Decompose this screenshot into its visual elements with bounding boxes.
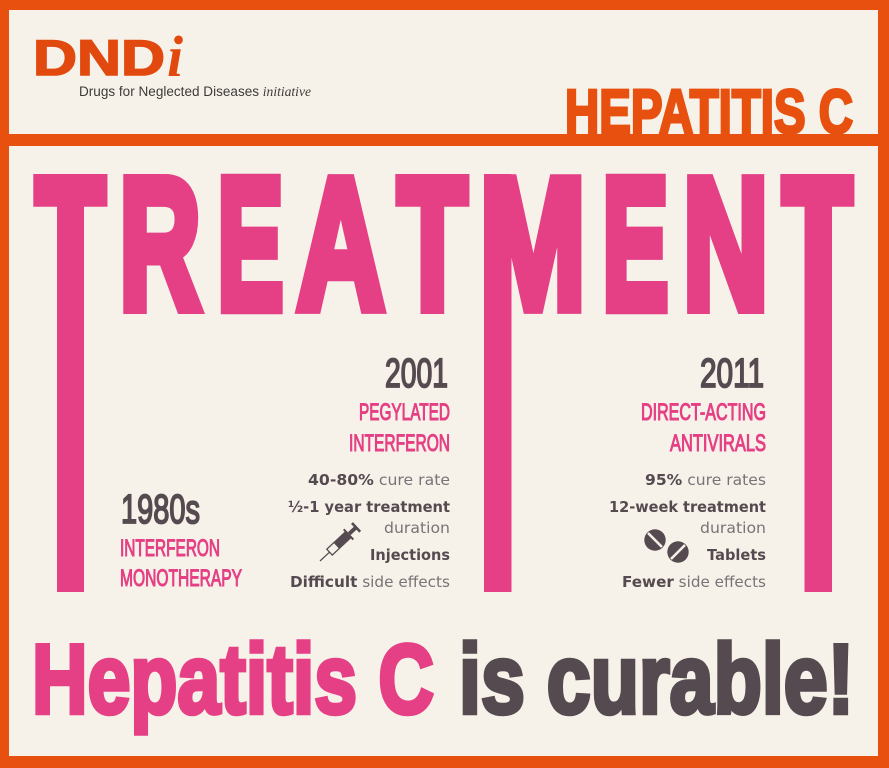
era: 2011: 12-week treatment (609, 498, 766, 516)
era: 2011: duration (700, 519, 766, 537)
era: 2011: Tablets (707, 546, 766, 564)
slogan: Hepatitis C is curable!: Hepatitis C (32, 624, 434, 734)
era: 2001: duration (384, 519, 450, 537)
title: Treatment: R (119, 140, 201, 348)
title: Treatment: N (683, 141, 768, 349)
era: 2011: Fewer side effects (622, 573, 766, 591)
era: 1980s: MONOTHERAPY (120, 565, 242, 592)
slogan: Hepatitis C is curable! (32, 624, 854, 734)
title: Treatment: A (297, 141, 385, 348)
era: 2011: ANTIVIRALS (670, 430, 766, 457)
DNDi logo: i (167, 24, 183, 89)
era: 1980s: 1980s (121, 486, 200, 532)
era: 2011: 2011 (700, 350, 764, 396)
era: 2001 (288, 350, 450, 591)
DNDi logo (33, 24, 311, 99)
era: 1980s (120, 486, 242, 592)
DNDi logo: DND (33, 30, 165, 86)
era: 2001: 40-80% cure rate (308, 471, 450, 489)
era: 2011 (609, 350, 766, 591)
title: Treatment: M (480, 140, 586, 348)
era: 1980s: INTERFERON (120, 535, 220, 562)
title: Treatment: T (783, 140, 852, 348)
icon: tablets (644, 529, 689, 563)
icon: syringe (315, 521, 362, 566)
era: 2001: PEGYLATED (359, 399, 450, 426)
title: Treatment: T (36, 140, 105, 348)
era: 2001: ½-1 year treatment (288, 498, 450, 516)
timeline stems (57, 174, 832, 592)
title: Treatment: T (398, 140, 467, 348)
title: Treatment: E (602, 139, 668, 348)
title: Treatment: E (218, 139, 283, 348)
era: 2001: INTERFERON (349, 430, 450, 457)
DNDi logo: Drugs for Neglected Diseases initiative (79, 84, 311, 99)
title: Treatment (36, 139, 852, 349)
era: 2011: 95% cure rates (645, 471, 766, 489)
era: 2001: Injections (370, 546, 450, 564)
era: 2011: DIRECT-ACTING (641, 399, 766, 426)
era: 2001: Difficult side effects (290, 573, 450, 591)
era: 2001: 2001 (385, 350, 448, 396)
